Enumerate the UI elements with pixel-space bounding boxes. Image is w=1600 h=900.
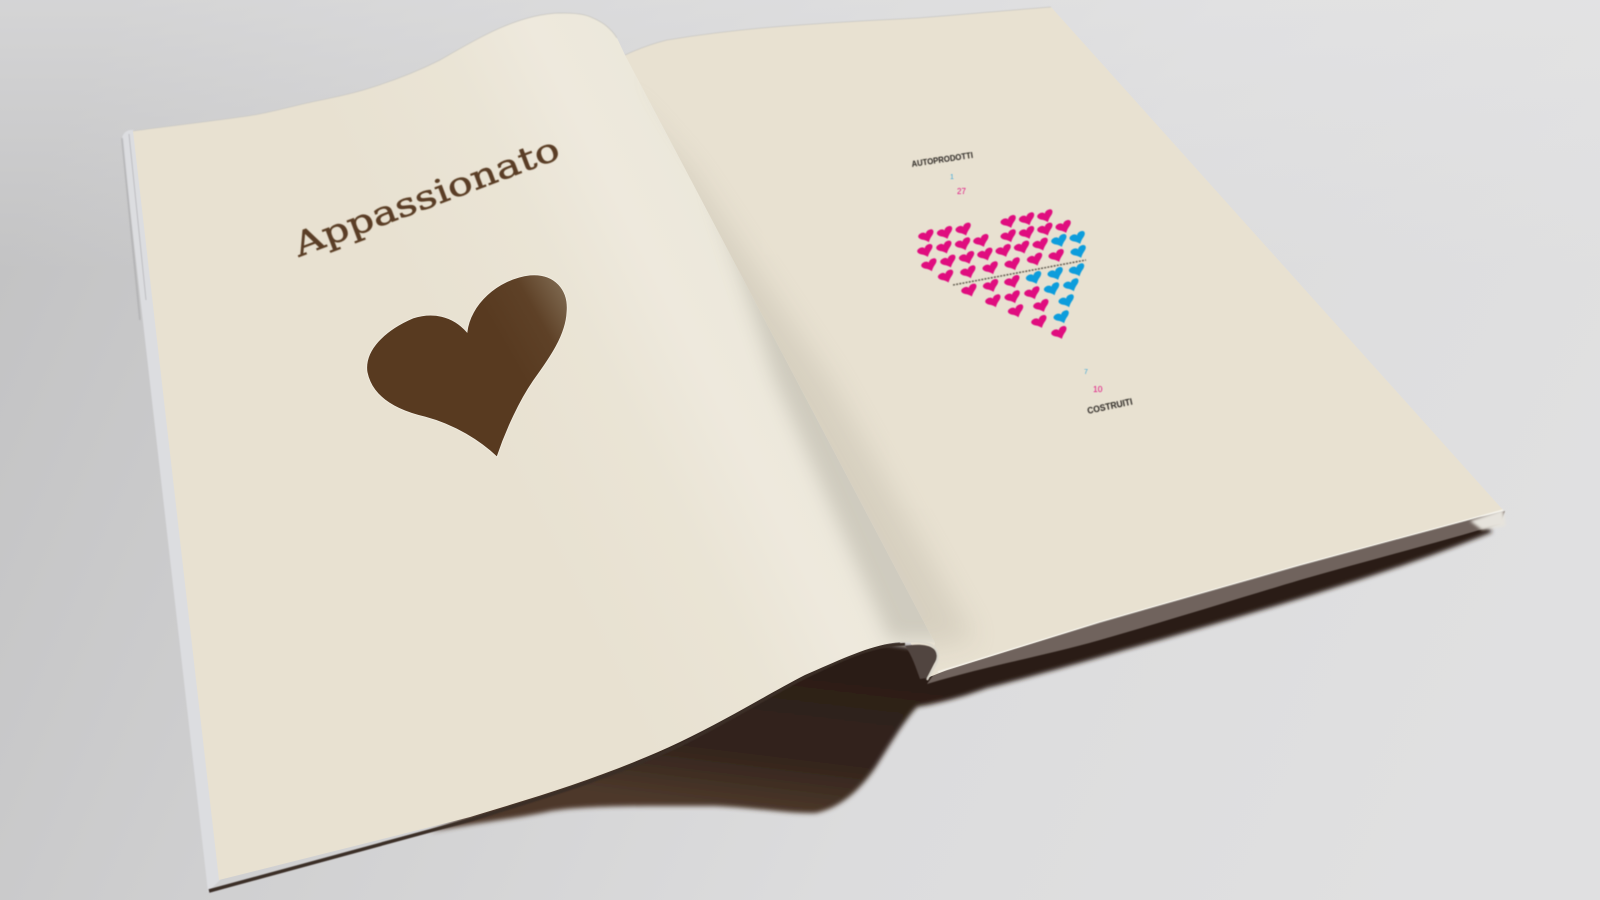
number: blue top: 1 — [950, 174, 954, 181]
blue hearts — [1025, 231, 1087, 324]
top edge line of left page — [133, 13, 617, 131]
title: Appassionato — [287, 129, 565, 265]
icon: large brown heart — [367, 275, 567, 457]
dotted divider — [953, 260, 1086, 285]
spine curl — [900, 642, 938, 680]
gutter shading on left page — [724, 245, 934, 643]
chart: heart of pink hearts — [917, 209, 1087, 340]
white edge on right page — [938, 510, 1503, 672]
number: pink bottom: 10 — [1093, 384, 1103, 394]
left edge: paper stack strip — [122, 130, 220, 892]
cast shadow under the book — [430, 515, 1492, 832]
infographic label: COSTRUITI: COSTRUITI — [1086, 397, 1133, 416]
page block: right side paper stack — [927, 511, 1505, 684]
panel: right page — [610, 7, 1503, 678]
number: blue bottom: 7 — [1084, 369, 1088, 376]
panel: left page — [133, 13, 960, 891]
dark bottom edge shadow — [209, 644, 905, 891]
pink hearts — [917, 209, 1072, 340]
number: pink top: 27 — [957, 187, 966, 196]
top edge line of right page — [625, 7, 1051, 55]
infographic heading: AUTOPRODOTTI: AUTOPRODOTTI — [911, 150, 974, 169]
gutter shading on right page — [680, 158, 966, 646]
page block: faded corner highlight — [1470, 509, 1506, 530]
